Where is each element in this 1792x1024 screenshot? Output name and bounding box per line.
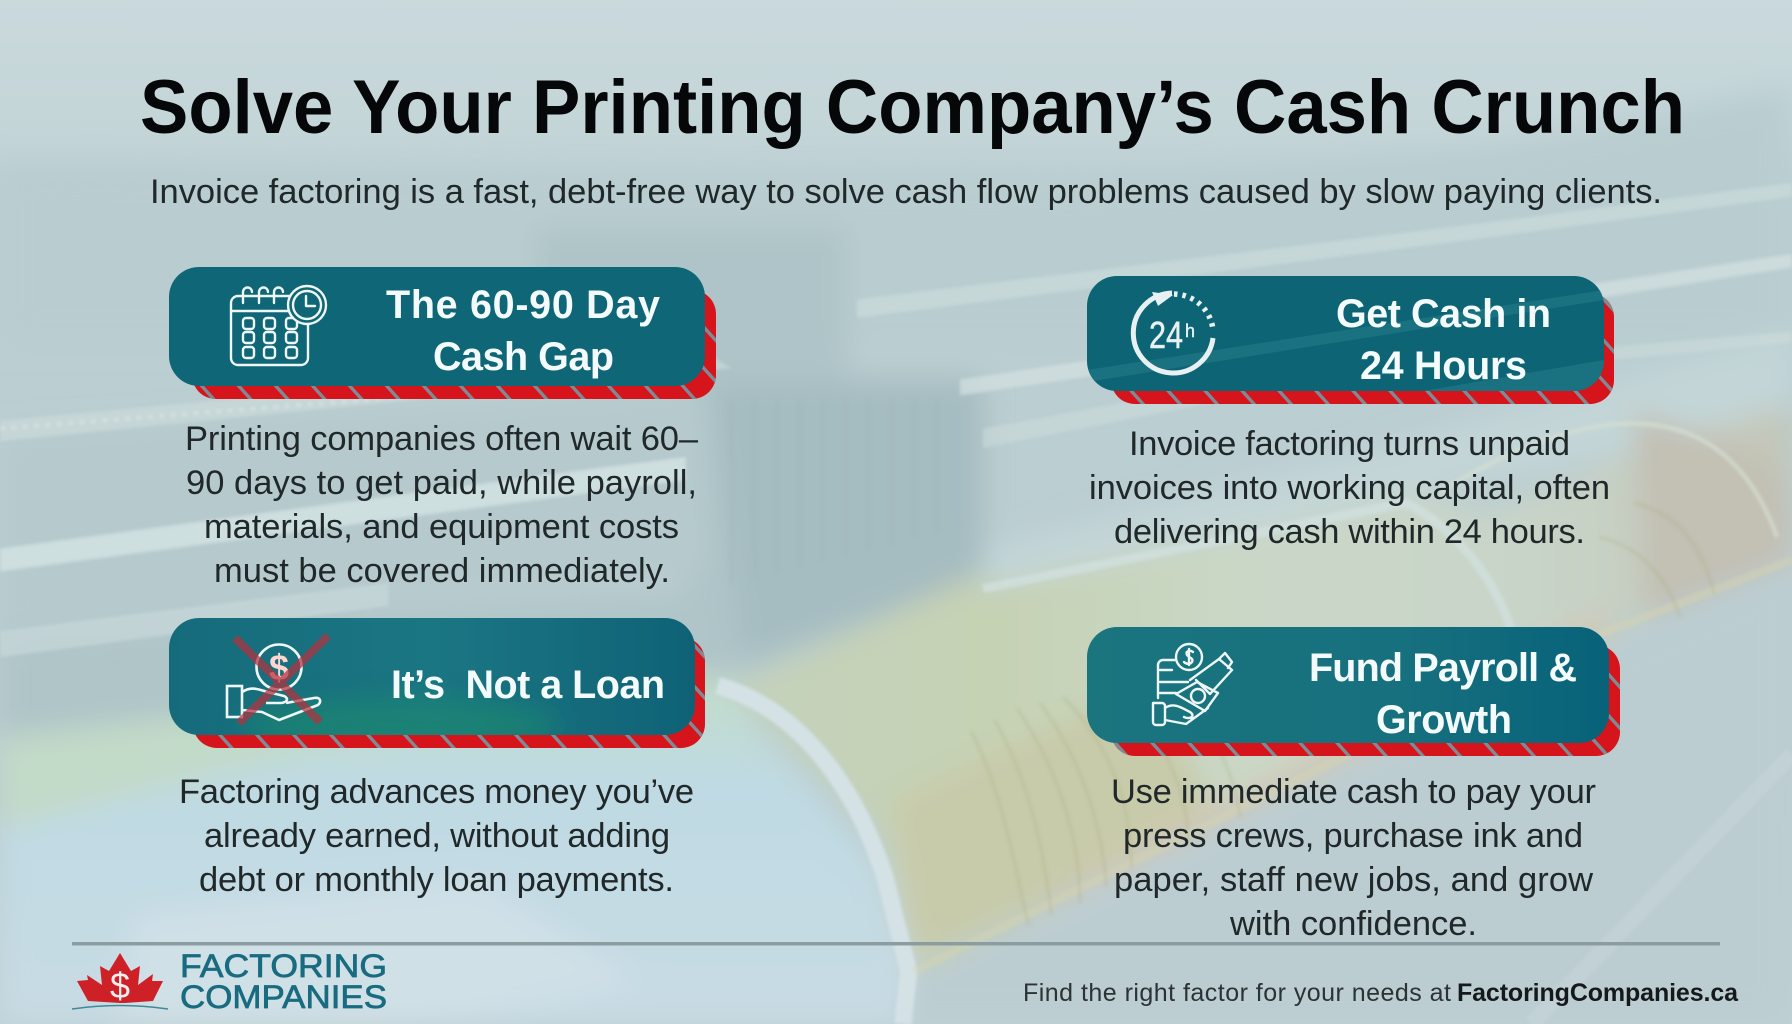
icon: maple leaf with dollar sign: $ <box>110 965 130 1006</box>
body text: Factoring advances money you’ve <box>179 773 694 811</box>
body text: debt or monthly loan payments. <box>199 861 674 899</box>
body text: press crews, purchase ink and <box>1123 817 1583 855</box>
heading <box>1336 292 1551 388</box>
card shadow: striped red <box>193 637 705 748</box>
card body <box>1087 627 1609 743</box>
body text: paper, staff new jobs, and grow <box>1114 861 1593 899</box>
heading: The 60-90 Day <box>386 283 660 327</box>
card body <box>1087 276 1604 395</box>
body text: with confidence. <box>1229 905 1477 943</box>
heading <box>1309 646 1577 742</box>
panel: get cash in 24 hours <box>1087 276 1614 551</box>
body text <box>1111 773 1596 943</box>
footer call to action <box>1023 979 1739 1007</box>
body text: already earned, without adding <box>204 817 670 855</box>
body text: Printing companies often wait 60– <box>185 420 699 458</box>
card shadow: striped red <box>192 290 716 399</box>
icon: 24 hour clock: 24 <box>1149 315 1183 357</box>
heading: Get Cash in <box>1336 292 1551 336</box>
heading <box>386 283 660 379</box>
footer call to action: Find the right factor for your needs at <box>1023 979 1451 1007</box>
footer divider <box>72 942 1720 946</box>
heading: It’s Not a Loan <box>391 663 665 707</box>
footer call to action: FactoringCompanies.ca <box>1457 979 1739 1007</box>
panel: it's not a loan <box>169 618 705 899</box>
body text <box>185 420 699 590</box>
body text: Use immediate cash to pay your <box>1111 773 1596 811</box>
icon: calendar with clock <box>231 286 326 365</box>
icon: 24 hour clock: h <box>1185 321 1195 341</box>
icon: 24 hour clock <box>1133 292 1213 373</box>
card body <box>169 267 705 386</box>
title: Solve Your Printing Company’s Cash Crunch <box>140 65 1685 150</box>
body text: Invoice factoring turns unpaid <box>1129 425 1570 463</box>
body text <box>1089 425 1610 551</box>
heading: Cash Gap <box>433 335 614 379</box>
logo: Factoring Companies <box>72 948 387 1015</box>
icon: hand with coin crossed out <box>227 636 328 723</box>
body text: 90 days to get paid, while payroll, <box>186 464 697 502</box>
body text: must be covered immediately. <box>214 552 670 590</box>
panel: 60-90 day cash gap <box>169 267 716 590</box>
body text: delivering cash within 24 hours. <box>1114 513 1585 551</box>
body text: materials, and equipment costs <box>204 508 679 546</box>
icon: maple leaf with dollar sign <box>72 953 168 1009</box>
heading: Growth <box>1376 698 1512 742</box>
wordmark: FACTORING <box>180 948 387 984</box>
subtitle: Invoice factoring is a fast, debt-free way to solve cash flow problems caused by slow paying clients. <box>150 173 1662 211</box>
icon: hand with coin crossed out: $ <box>269 647 289 688</box>
body text <box>179 773 694 899</box>
body text: invoices into working capital, often <box>1089 469 1610 507</box>
heading: Fund Payroll & <box>1309 646 1577 690</box>
wordmark <box>180 948 387 1015</box>
card shadow: striped red <box>1111 293 1614 404</box>
card shadow: striped red <box>1111 645 1620 756</box>
card body <box>169 618 695 735</box>
heading: 24 Hours <box>1360 344 1527 388</box>
icon: payroll hand with bills <box>1153 644 1232 725</box>
wordmark: COMPANIES <box>180 979 387 1015</box>
panel: fund payroll and growth <box>1087 627 1620 943</box>
